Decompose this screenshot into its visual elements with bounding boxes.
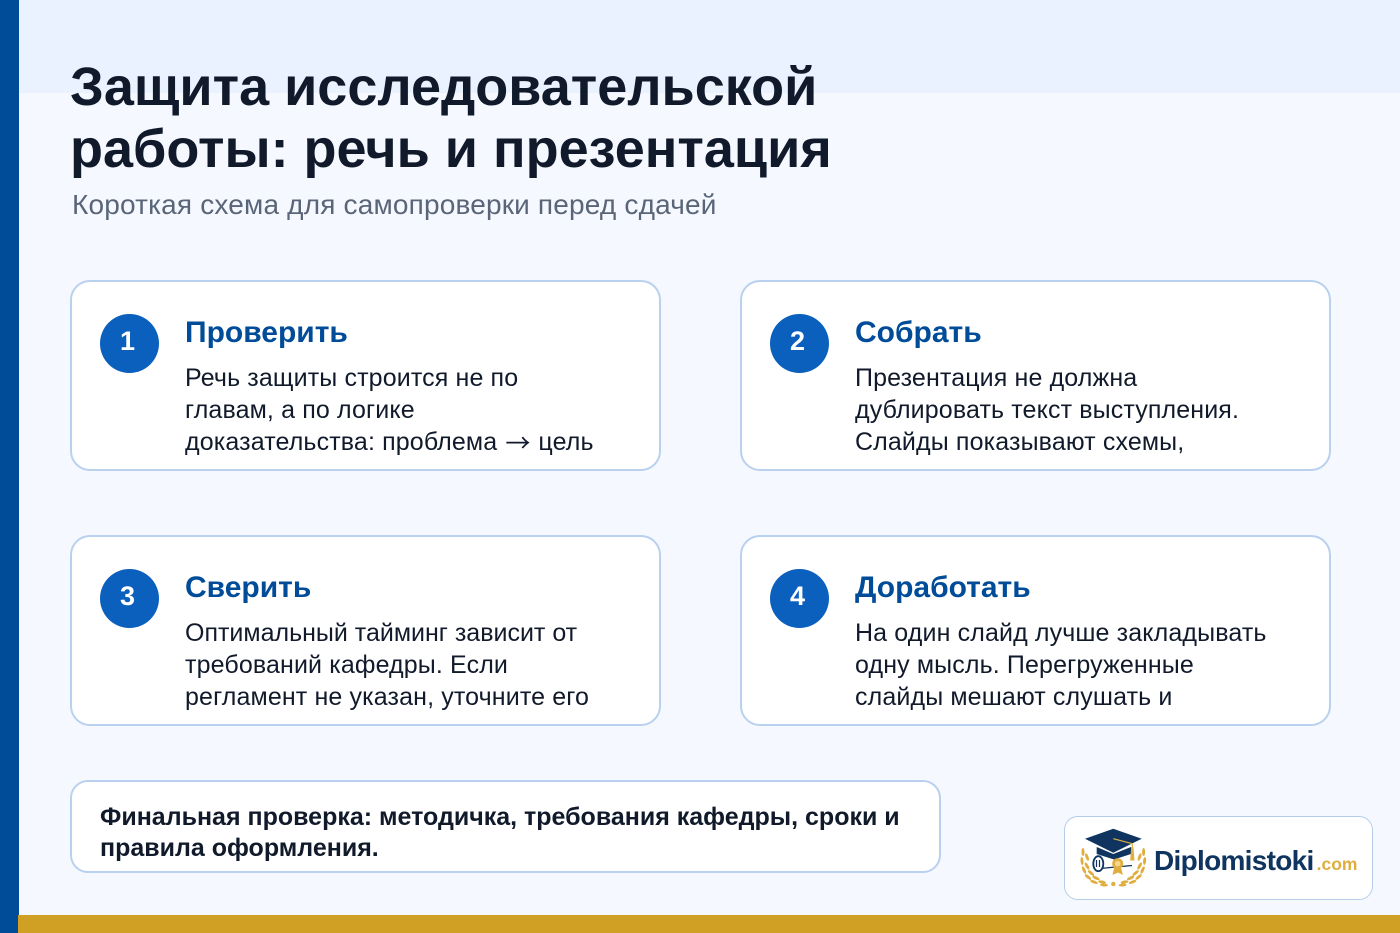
number badge 2 xyxy=(770,314,829,373)
logo card xyxy=(1064,816,1373,900)
callout text xyxy=(100,803,900,862)
card 3 text: требований кафедры. Если xyxy=(185,651,508,679)
heading: Доработать: Доработать xyxy=(855,571,1031,604)
card 4 text xyxy=(855,619,1267,711)
title: Защита исследовательской xyxy=(70,57,817,117)
number badge 4: 4 xyxy=(790,581,805,611)
card 3 text: регламент не указан, уточните его xyxy=(185,683,589,711)
callout: final check xyxy=(70,780,941,873)
number badge 3: 3 xyxy=(120,581,135,611)
card 2 text: дублировать текст выступления. xyxy=(855,396,1239,424)
panel: card 2 xyxy=(740,280,1331,471)
card 3 text: Оптимальный тайминг зависит от xyxy=(185,619,577,647)
callout text: правила оформления. xyxy=(100,834,379,862)
card 1 text: доказательства: проблема → цель xyxy=(185,424,594,460)
card 4 text: На один слайд лучше закладывать xyxy=(855,619,1267,647)
number badge 1 xyxy=(100,314,159,373)
heading: Сверить: Сверить xyxy=(185,571,311,604)
logo wordmark: Diplomistoki.com xyxy=(1154,845,1357,876)
card 1 text: Речь защиты строится не по xyxy=(185,364,518,392)
card 1 text xyxy=(185,364,594,460)
icon: graduation cap with laurel xyxy=(1080,828,1146,886)
subtitle: Короткая схема для самопроверки перед сдачей xyxy=(72,189,717,220)
card 4 text: одну мысль. Перегруженные xyxy=(855,651,1194,679)
heading: Проверить: Проверить xyxy=(185,316,348,349)
card 2 text: Презентация не должна xyxy=(855,364,1137,392)
number badge 2: 2 xyxy=(790,326,805,356)
card 2 text: Слайды показывают схемы, xyxy=(855,428,1184,456)
number badge 3 xyxy=(100,569,159,628)
title: работы: речь и презентация xyxy=(70,119,832,179)
title xyxy=(70,57,832,179)
heading: Собрать: Собрать xyxy=(855,316,982,349)
panel: card 4 xyxy=(740,535,1331,726)
card 1 text: главам, а по логике xyxy=(185,396,415,424)
callout text: Финальная проверка: методичка, требования кафедры, сроки и xyxy=(100,803,900,831)
card 4 text: слайды мешают слушать и xyxy=(855,683,1172,711)
panel: card 1 xyxy=(70,280,661,471)
card 3 text xyxy=(185,619,589,711)
left accent bar xyxy=(0,0,19,933)
card 2 text xyxy=(855,364,1239,456)
number badge 4 xyxy=(770,569,829,628)
header band xyxy=(18,0,1400,93)
bottom gold bar xyxy=(18,915,1400,933)
number badge 1: 1 xyxy=(120,326,135,356)
panel: card 3 xyxy=(70,535,661,726)
